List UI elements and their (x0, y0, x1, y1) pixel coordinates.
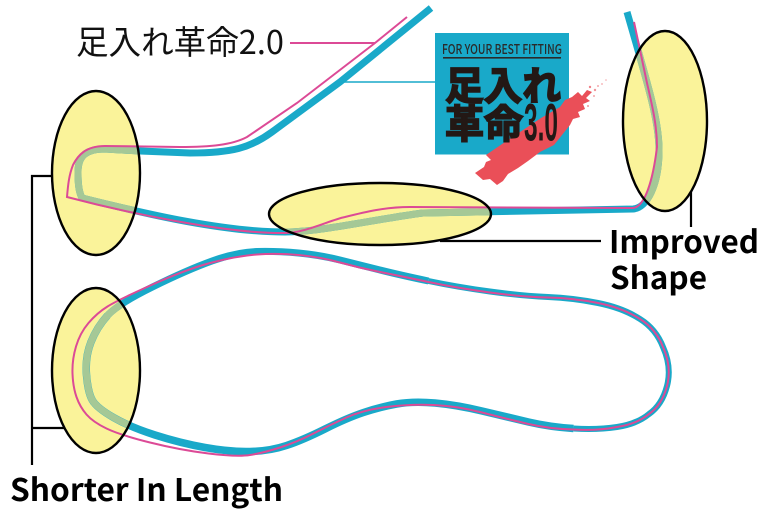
tagline: FOR YOUR BEST FITTING (442, 38, 562, 58)
overlap of 3.0 outline with ellipses (74, 49, 662, 428)
insole outline 2.0 (67, 17, 669, 456)
label: improved shape (609, 217, 759, 298)
ellipse outlines (52, 31, 707, 453)
label: 2.0 title: 足入れ革命2.0 (76, 16, 284, 64)
logo: 足入れ革命3.0 (435, 33, 607, 185)
highlight ellipses (52, 31, 707, 453)
red brush stroke (475, 79, 607, 185)
logo line 1: 足入れ (445, 56, 561, 112)
label: improved shape: Shape (610, 253, 707, 298)
insole outline 3.0 (78, 8, 669, 452)
tagline rule (443, 57, 561, 59)
leader lines (32, 176, 691, 465)
label: improved shape: Improved (609, 217, 759, 262)
label: shorter in length: Shorter In Length (10, 465, 283, 510)
logo background (435, 33, 569, 154)
logo: 足入れ革命3.0: 3.0 (524, 94, 558, 152)
logo line 2: 革命 (445, 94, 523, 150)
